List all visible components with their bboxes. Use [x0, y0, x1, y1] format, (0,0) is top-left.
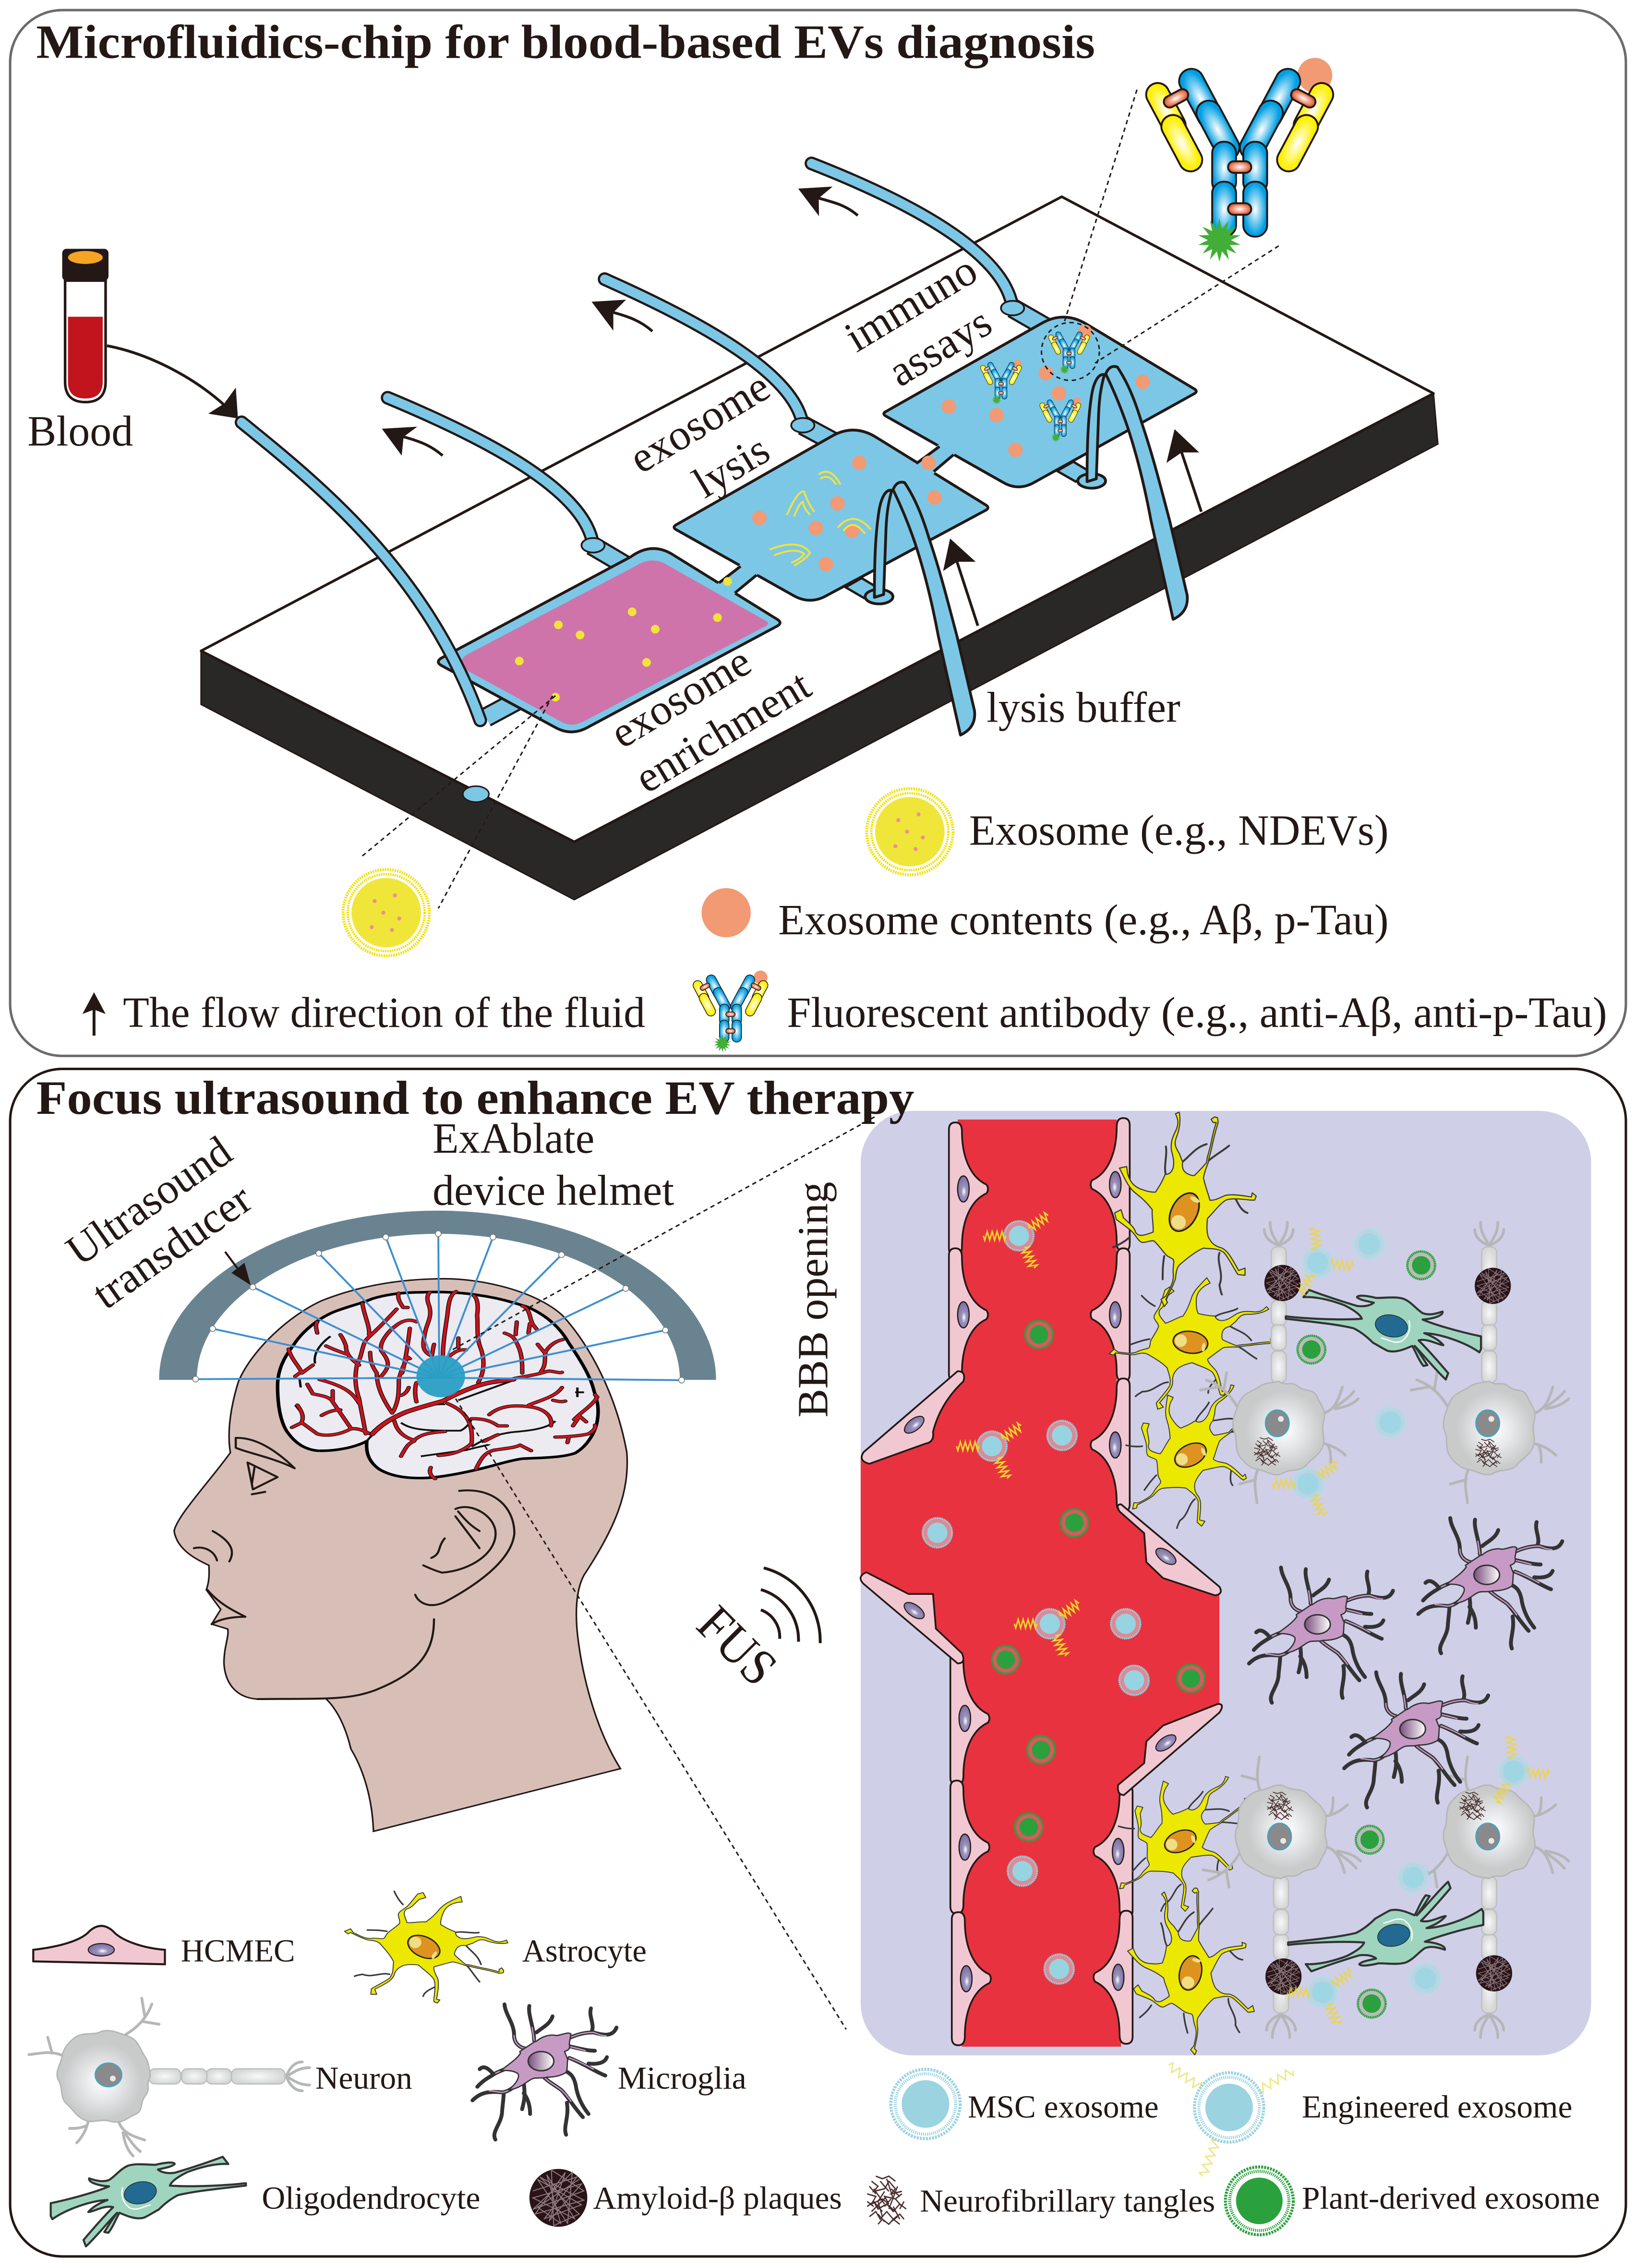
chamber: exosome enrichment — [438, 549, 780, 732]
title: microfluidics chip: Microfluidics-chip for blood-based EVs diagnosis — [36, 15, 1095, 69]
label: exablate device helmet: ExAblate — [433, 1114, 594, 1162]
exosome contents in lysis chamber — [752, 456, 942, 571]
panel: focused ultrasound therapy — [10, 1069, 1626, 2256]
legend text: exosome: Exosome (e.g., NDEVs) — [969, 806, 1389, 854]
label: ultrasound transducer: transducer — [84, 1174, 260, 1318]
legend icon: exosome contents — [701, 888, 751, 937]
label: ultrasound transducer: Ultrasound — [57, 1126, 241, 1275]
microglia — [1249, 1518, 1562, 1808]
legend icon: flow arrow — [83, 992, 106, 1036]
label: exablate device helmet — [433, 1114, 674, 1215]
face features — [194, 1438, 514, 1699]
legend: HCMEC — [33, 1926, 295, 1968]
brain with vessels — [277, 1291, 598, 1479]
head outline — [174, 1279, 627, 1831]
label: BBB opening: BBB opening — [789, 1182, 837, 1417]
legend: astrocyte — [345, 1892, 647, 2003]
brain sulci — [295, 1336, 584, 1456]
icon: large fluorescent antibody — [1142, 58, 1337, 262]
legend: engineered exosome — [1166, 2062, 1572, 2178]
microfluidic tubes — [241, 163, 1024, 720]
label: blood: Blood — [27, 407, 133, 455]
oligodendrocytes — [1286, 1290, 1483, 1971]
legend text: flow direction: The flow direction of the fluid — [123, 988, 645, 1037]
panel: blood-brain barrier scene — [861, 1111, 1591, 2055]
legend: neurofibrillary tangles: Neurofibrillary tangles — [920, 2184, 1215, 2219]
legend: microglia — [472, 2004, 746, 2139]
legend: amyloid plaques: Amyloid-β plaques — [593, 2181, 842, 2216]
panel: microfluidics chip — [10, 10, 1626, 1056]
flow direction arrows — [107, 187, 1202, 626]
label: immuno assays: immuno — [836, 245, 985, 361]
brain outline — [277, 1292, 598, 1478]
label: exosome lysis: exosome — [621, 362, 778, 483]
exosome contents in immuno chamber — [942, 325, 1150, 457]
legend icon: exosome — [867, 789, 953, 875]
legend: oligodendrocyte — [51, 2157, 480, 2246]
endothelial cells — [861, 1118, 1222, 2045]
legend: neuron: Neuron — [315, 2061, 412, 2096]
legend: microglia: Microglia — [618, 2061, 746, 2096]
transducer elements — [192, 1231, 685, 1383]
icons: small antibodies in chamber — [979, 329, 1091, 442]
necks joining chambers — [716, 443, 956, 595]
exosomes in brain tissue — [1272, 1223, 1559, 2027]
legend: amyloid plaques — [529, 2169, 842, 2227]
arrow: to transducer — [225, 1252, 251, 1285]
legend: MSC exosome — [891, 2069, 1159, 2139]
legend: neurofibrillary tangles — [867, 2176, 1215, 2224]
legend: HCMEC: HCMEC — [181, 1933, 295, 1968]
lysis buffer inlet tube — [865, 482, 974, 735]
amyloid plaques — [1264, 1265, 1512, 1995]
legend: engineered exosome: Engineered exosome — [1302, 2090, 1572, 2125]
legend: plant-derived exosome — [1226, 2167, 1600, 2235]
legend icon: fluorescent antibody — [691, 971, 770, 1052]
title: focus ultrasound: Focus ultrasound to enhance EV therapy — [36, 1071, 914, 1124]
icon: ultrasound waves — [761, 1568, 820, 1643]
dotted zoom lines from brain to scene — [453, 1117, 875, 2029]
chamber: exosome lysis — [674, 430, 988, 600]
blood vessel lumen — [861, 1120, 1219, 2047]
label: exosome enrichment: enrichment — [626, 660, 819, 802]
exosomes in blood — [923, 1212, 1205, 1984]
astrocytes — [1088, 1112, 1291, 2066]
label: exablate device helmet: device helmet — [433, 1166, 674, 1215]
immuno inlet tube — [1078, 366, 1187, 619]
chip slab — [201, 197, 1438, 900]
label: exosome enrichment: exosome — [602, 637, 759, 758]
legend: plant-derived exosome: Plant-derived exosome — [1302, 2181, 1600, 2216]
helmet — [159, 1211, 716, 1380]
legend: neuron — [29, 1998, 412, 2156]
legend: MSC exosome: MSC exosome — [968, 2090, 1159, 2125]
legend: oligodendrocyte: Oligodendrocyte — [262, 2181, 480, 2216]
dotted zoom callout to antibody — [360, 90, 1279, 908]
label: immuno assays: assays — [880, 297, 1000, 396]
chamber: immuno assays — [884, 317, 1196, 487]
legend: astrocyte: Astrocyte — [522, 1933, 647, 1968]
legend text: exosome contents: Exosome contents (e.g., Aβ, p-Tau) — [778, 895, 1389, 944]
icon: exosome callout — [343, 869, 429, 956]
head silhouette and face — [174, 1279, 627, 1831]
label: lysis buffer: lysis buffer — [986, 683, 1180, 731]
channel stubs beside chambers — [486, 308, 1090, 717]
ultrasound beams — [195, 1234, 682, 1380]
legend text: fluorescent antibody: Fluorescent antibody (e.g., anti-Aβ, anti-p-Tau) — [787, 988, 1607, 1037]
label: exosome lysis: lysis — [685, 425, 778, 507]
label: FUS: FUS — [686, 1594, 788, 1697]
focal spot — [417, 1355, 465, 1397]
brain vessels — [289, 1291, 597, 1479]
yellow exosomes in enrichment chamber — [515, 577, 732, 701]
neurons — [1201, 1222, 1569, 2038]
icon: blood tube — [62, 249, 108, 402]
